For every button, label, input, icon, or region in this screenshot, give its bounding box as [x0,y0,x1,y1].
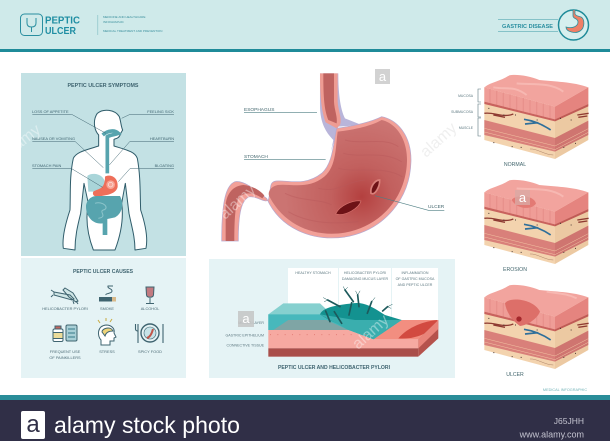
diagram column labels: HEALTHY STOMACH [295,271,331,275]
stomach labels [244,107,445,210]
serosa fat layer [320,73,362,152]
symptom labels: FEELING SICK [147,109,174,114]
stomach labels: STOMACH [244,154,268,160]
mucus layer [268,303,348,330]
diagram column labels: INFLAMMATION [402,271,429,275]
diagram title: PEPTIC ULCER AND HELICOBACTER PYLORI [278,365,391,371]
symptom labels: HEARTBURN [150,136,174,141]
panel: symptoms [21,73,186,256]
side face [418,320,438,357]
cause labels: STRESS [99,349,115,354]
diagram side labels: MUCUS LAYER [238,321,264,325]
epithelium [268,330,418,348]
submucosa platform [273,320,348,330]
header subtitle: INFOGRAPHIC [103,20,125,24]
tissue block: normal [451,75,589,168]
panel: causes [21,258,186,378]
esophagus [320,73,341,128]
watermarks [0,69,530,353]
bacteria [323,287,392,323]
image id [519,416,584,440]
layer labels [451,94,474,130]
label: ULCER [506,372,524,378]
title: PEPTIC [45,14,80,26]
cause labels: OF PAINKILLERS [49,355,81,360]
pink tissue surface [373,320,438,339]
header subtitle [98,15,162,35]
body diagram [32,110,174,250]
footer [0,395,610,441]
footer logo [21,411,45,439]
watermarks: alamy [216,182,259,223]
diagram side labels [225,321,265,348]
tissue block: erosion [484,180,589,273]
stomach wall [222,117,411,241]
symptom labels: STOMACH PAIN [32,163,61,168]
diagram column labels: DAMAGING MUCUS LAYER [342,277,389,281]
watermarks: a [242,311,250,326]
diagram column labels [295,271,435,287]
watermarks: a [519,190,527,205]
footer: a [26,411,40,438]
header subtitle: MEDICINE AND HEALTHCARE [103,15,145,19]
icon: smoke [99,286,116,302]
header subtitle: MEDICAL TREATMENT AND PREVENTION [103,29,162,33]
heading: causes: PEPTIC ULCER CAUSES [73,269,134,275]
header band [0,0,610,52]
symptom labels: BLOATING [155,163,174,168]
icon: stethoscope logo [20,14,42,36]
tissue block: ulcer [484,285,589,378]
title: ULCER [45,25,76,37]
heading: symptoms: PEPTIC ULCER SYMPTOMS [68,83,139,89]
footer wordmark: alamy stock photo [54,412,240,438]
panel: helicobacter pylori diagram [209,259,455,378]
icon: spicy food [136,324,163,343]
symptom leader lines [32,114,174,187]
image id: www.alamy.com [519,430,584,440]
image id: J65JHH [554,416,584,426]
stomach lumen [269,120,407,234]
diagram side labels: GASTRIC EPITHELIUM [225,334,264,338]
leader lines [244,112,444,210]
cause labels: SPICY FOOD [138,349,162,354]
label: EROSION [503,267,527,273]
label: NORMAL [504,162,526,168]
symptom labels: NAUSEA OR VOMITING [32,136,75,141]
cause labels: HELICOBACTER PYLORI [42,306,88,311]
title [45,14,80,37]
stomach illustration [222,73,444,241]
inflammation ulcer [398,320,437,339]
layer labels: SUBMUCOSA [451,110,474,114]
cause labels: FREQUENT USE [50,349,81,354]
icon: stress [98,318,116,345]
gastric disease badge [498,10,588,40]
diagram column labels: AND PEPTIC ULCER [398,283,433,287]
watermarks: alamy [0,121,44,161]
layer brackets [478,89,481,136]
gastric folds [285,140,402,223]
medical infographic tag: MEDICAL INFOGRAPHIC [543,388,587,392]
layer labels: MUCOSA [458,94,474,98]
symptom labels [32,109,174,168]
gastric disease badge: GASTRIC DISEASE [502,24,553,30]
cause labels: SMOKE [100,306,114,311]
watermarks: alamy [349,312,392,353]
diagram column labels: HELICOBACTER PYLORI [344,271,386,275]
icon: painkillers [53,325,77,342]
cause labels [42,306,162,360]
diagram column labels: OF GASTRIC MUCOSA [396,277,435,281]
icon: helicobacter pylori [51,288,78,304]
stomach labels: ESOPHAGUS [244,107,274,113]
layer labels: MUSCLE [459,126,474,130]
watermarks: alamy [417,120,460,161]
symptom labels: LOSS OF APPETITE [32,109,69,114]
ulcers [336,201,361,214]
watermarks: a [379,69,387,84]
icon: alcohol [146,287,154,304]
diagram side labels: CONNECTIVE TISSUE [227,344,265,348]
cause labels: ALCOHOL [141,306,160,311]
stomach labels: ULCER [428,204,445,210]
connective tissue [268,348,418,357]
